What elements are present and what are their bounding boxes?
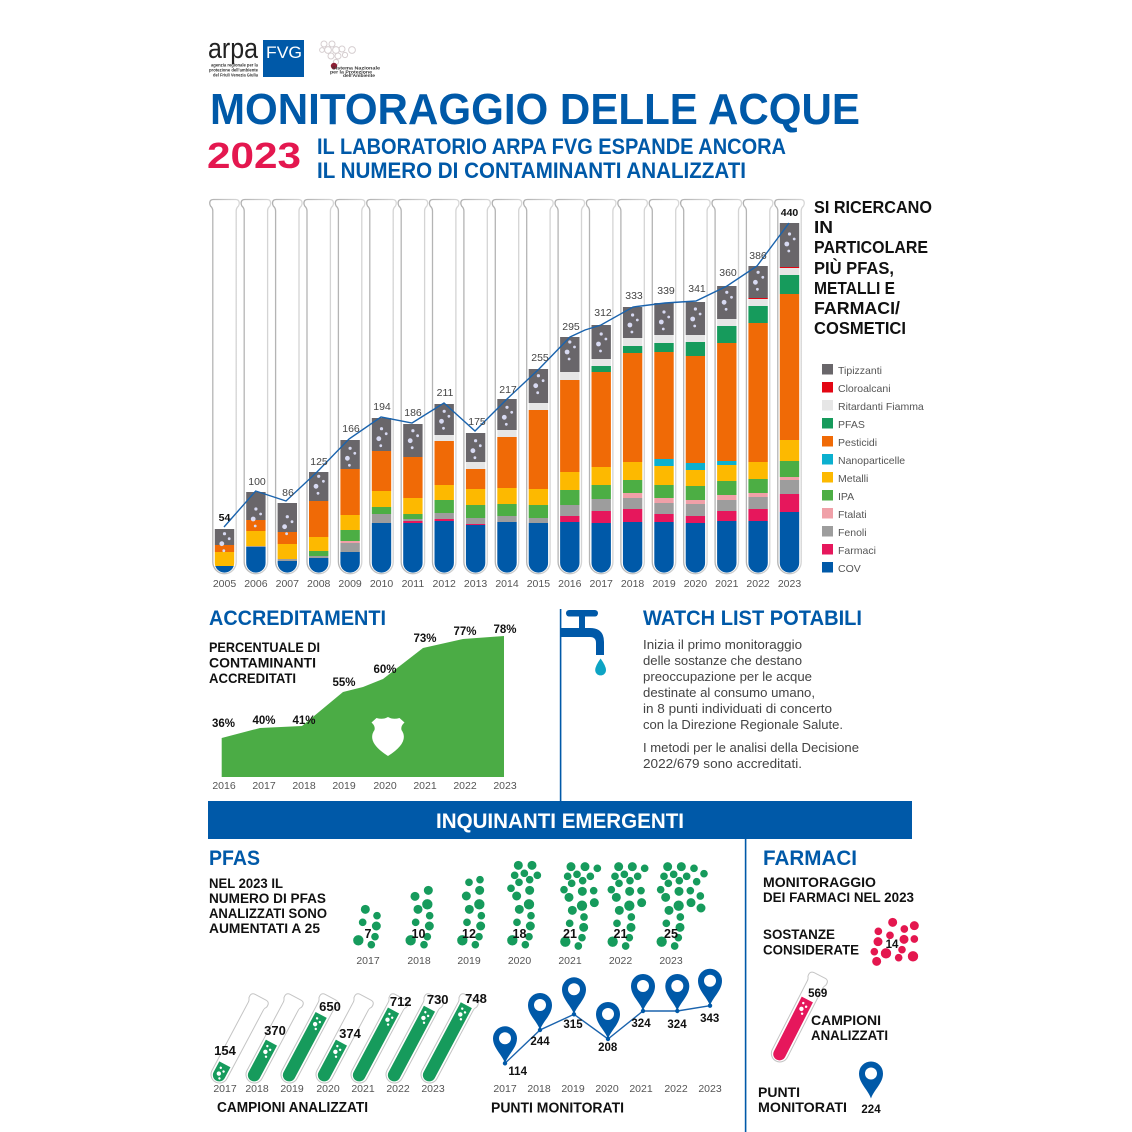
tube 374 [312,992,375,1087]
tube 2023 [775,200,804,575]
year axis: 2006 [244,578,268,590]
percentages: 77% [453,626,477,638]
sample values: 370 [264,1023,286,1038]
subtitle: IL NUMERO DI CONTAMINANTI ANALIZZATI [317,158,746,183]
total values: 211 [437,387,454,399]
year axis: 2019 [652,578,676,590]
total values: 341 [688,283,706,295]
legend: Metalli [838,473,868,485]
text block: I metodi per le analisi della Decisione [643,740,859,755]
year axis: 2012 [433,578,456,590]
banner: inquinanti emergenti: INQUINANTI EMERGENTI [436,810,684,833]
cluster years: 2020 [508,955,531,967]
text: percentuale di contaminanti accreditati: CONTAMINANTI [209,654,316,670]
total values: 386 [749,250,767,262]
total values: 217 [499,384,517,396]
legend: IPA [838,491,854,503]
tube 2007 [273,200,302,575]
total values: 295 [562,321,580,333]
value 14: 14 [886,939,899,951]
year axis: 2021 [715,578,739,590]
chart: punti monitorati pins [491,969,722,1116]
heading: accreditamenti: ACCREDITAMENTI [209,607,386,630]
text: percentuale di contaminanti accreditati [209,639,320,686]
cluster counts: 12 [462,927,476,941]
percentages: 41% [292,715,316,727]
year axis: 2014 [495,578,519,590]
tube 2017 [586,200,616,575]
cluster counts: 21 [614,927,627,941]
caption: punti monitorati: PUNTI MONITORATI [491,1100,624,1116]
cluster counts: 25 [664,927,678,941]
cluster years: 2017 [356,955,380,967]
legend: COV [838,563,861,575]
panel: PFAS [209,847,707,967]
text: numero di PFAS: AUMENTATI A 25 [209,921,320,936]
years: 2016 [212,780,236,792]
cluster counts: 18 [513,927,526,941]
text: monitoraggio dei farmaci [763,875,914,905]
year axis: 2015 [527,578,550,590]
text: numero di PFAS: NUMERO DI PFAS [209,891,326,906]
text: campioni analizzati: ANALIZZATI [811,1027,888,1043]
chart: campioni analizzati tubes [207,991,487,1116]
point years: 2019 [561,1083,585,1095]
sample years: 2021 [351,1083,375,1095]
tube 2014 [492,200,522,575]
tube 2019 [649,200,679,575]
sample years: 2017 [213,1083,237,1095]
years: 2019 [332,780,356,792]
text: numero di PFAS [209,876,327,936]
point years: 2017 [493,1083,517,1095]
tube 2021 [712,200,742,575]
year axis: 2018 [621,578,644,590]
cluster years [356,955,683,967]
legend: Pesticidi [838,437,877,449]
logo: ARPA FVG: agenzia regionale per la [211,62,258,68]
map pins [493,969,722,1063]
sample years: 2022 [386,1083,410,1095]
sample values: 374 [339,1026,362,1041]
dot clusters [354,861,707,949]
percentages: 73% [413,633,437,645]
point values: 315 [563,1019,583,1031]
point years: 2020 [595,1083,619,1095]
point values: 324 [667,1019,687,1031]
tube 154 [207,992,270,1087]
trend line [224,223,789,527]
years: 2021 [413,780,437,792]
callout: si ricercano: PARTICOLARE [814,237,928,257]
logo: Sistema Nazionale per la Protezione dell'Ambiente: Sistema Nazionale [332,66,381,70]
years: 2022 [453,780,477,792]
year axis: 2005 [213,578,236,590]
text: campioni analizzati: CAMPIONI [811,1012,881,1028]
callout: si ricercano: IN [814,217,833,237]
callout: si ricercano: PIÙ PFAS, [814,257,894,278]
percentages: 40% [252,715,276,727]
year 2023: 2023 [207,135,301,176]
cluster counts: 21 [563,927,577,941]
tube 748 [417,992,480,1087]
text: sostanze considerate: SOSTANZE [763,926,835,942]
years [212,780,517,792]
value 224: 224 [861,1104,881,1116]
sample years [213,1083,445,1095]
sample values: 712 [390,994,412,1009]
tube 2006 [241,200,271,575]
cluster counts [365,927,678,941]
total values: 100 [248,476,266,488]
total values: 54 [219,512,230,524]
text block: 2022/679 sono accreditati. [643,756,802,771]
year axis: 2023 [778,578,801,590]
tube 2018 [618,200,647,575]
logo: ARPA FVG: FVG [266,43,302,62]
total values: 255 [531,352,549,364]
year axis: 2008 [307,578,331,590]
sample values [214,991,487,1058]
tube 2012 [429,200,459,575]
year axis [213,578,801,590]
sample values: 650 [319,999,341,1014]
point values: 114 [508,1066,528,1078]
cluster years: 2018 [407,955,431,967]
text block [643,637,859,771]
logo: Sistema Nazionale per la Protezione dell'Ambiente: dell'Ambiente [343,73,376,78]
percentages: 78% [493,624,517,636]
total values: 86 [282,487,294,499]
caption: campioni analizzati: CAMPIONI ANALIZZATI [217,1100,368,1116]
total values: 339 [657,285,675,297]
year axis: 2011 [402,578,424,590]
point years: 2022 [664,1083,688,1095]
tube 2022 [743,200,773,575]
text: monitoraggio dei farmaci: DEI FARMACI NEL 2023 [763,890,914,905]
logo: ARPA FVG: arpa [208,33,259,65]
year axis: 2016 [558,578,582,590]
banner: inquinanti emergenti [208,801,912,839]
years: 2018 [292,780,316,792]
chart: test tube stacked bars [210,200,804,590]
callout: si ricercano [814,197,932,338]
sample values: 748 [465,991,487,1006]
heading: PFAS: PFAS [209,847,260,870]
subtitle [317,134,786,183]
total values: 312 [594,307,612,319]
sample years: 2018 [245,1083,269,1095]
panel: watch list potabili [643,607,862,771]
point values: 244 [530,1036,550,1048]
text: punti monitorati: PUNTI [758,1084,800,1100]
tube 2013 [461,200,490,575]
year axis: 2007 [276,578,299,590]
legend: Cloroalcani [838,383,891,395]
cluster years: 2022 [609,955,632,967]
tube 712 [347,992,410,1087]
sample values: 154 [214,1043,237,1058]
heading: farmaci: FARMACI [763,847,857,870]
tube 2011 [398,200,428,575]
total values: 333 [625,290,643,302]
year axis: 2017 [590,578,613,590]
point years: 2021 [629,1083,653,1095]
year axis: 2010 [370,578,393,590]
text: monitoraggio dei farmaci: MONITORAGGIO [763,875,876,890]
text block: preoccupazione per le acque [643,669,812,684]
legend: Farmaci [838,545,876,557]
value 569: 569 [808,988,827,1000]
text: numero di PFAS: ANALIZZATI SONO [209,906,327,921]
callout: si ricercano: FARMACI/ [814,298,900,318]
percentages: 36% [212,718,235,730]
year axis: 2022 [746,578,770,590]
year axis: 2020 [684,578,707,590]
tube 650 [277,992,340,1087]
text: punti monitorati: MONITORATI [758,1099,847,1115]
text block: destinate al consumo umano, [643,685,815,700]
legend: Nanoparticelle [838,455,905,467]
text: punti monitorati [758,1084,847,1115]
year axis: 2013 [464,578,487,590]
tube 2008 [304,200,333,575]
text: percentuale di contaminanti accreditati: PERCENTUALE DI [209,639,320,655]
logo: ARPA FVG: del Friuli Venezia Giulia [213,72,258,78]
logo: Sistema Nazionale per la Protezione dell'Ambiente: per la Protezione [330,70,373,74]
connecting line [503,1004,712,1066]
legend: Ritardanti Fiamma [838,401,924,413]
tube 2015 [524,200,553,575]
cluster years: 2021 [558,955,582,967]
years: 2023 [493,780,517,792]
text: campioni analizzati [811,1012,888,1043]
total values: 175 [468,416,486,428]
title: MONITORAGGIO DELLE ACQUE [210,85,860,134]
point years: 2023 [698,1083,722,1095]
tube 2010 [367,200,396,575]
text: sostanze considerate: CONSIDERATE [763,942,859,958]
text block: in 8 punti individuati di concerto [643,701,832,716]
legend: Tipizzanti [838,365,882,377]
tube 2020 [681,200,710,575]
sample years: 2020 [316,1083,340,1095]
point values [508,1013,719,1078]
total values: 186 [404,407,422,419]
icon: shield [372,717,404,756]
point values: 324 [631,1018,651,1030]
icon: tap [560,610,606,675]
percentages [212,624,517,730]
legend [822,364,924,575]
years: 2017 [252,780,276,792]
cluster years: 2023 [659,955,683,967]
point years: 2018 [527,1083,551,1095]
tube 2005 [210,200,239,575]
cluster counts: 7 [365,927,372,941]
legend: Fenoli [838,527,867,539]
point years [493,1083,722,1095]
pin [859,1062,883,1098]
sample years: 2019 [280,1083,304,1095]
cluster years: 2019 [457,955,481,967]
sample values: 730 [427,992,449,1007]
total values: 440 [781,207,798,219]
total values: 194 [373,401,391,413]
tube 730 [382,992,445,1087]
years: 2020 [373,780,397,792]
total values: 360 [719,267,737,279]
area chart [222,636,504,777]
legend: Ftalati [838,509,867,521]
panel: farmaci [758,847,918,1116]
subtitle: IL LABORATORIO ARPA FVG ESPANDE ANCORA [317,134,786,159]
cluster counts: 10 [412,927,425,941]
percentages: 60% [373,664,397,676]
callout: si ricercano: COSMETICI [814,318,906,338]
logo: Sistema Nazionale per la Protezione dell'Ambiente [320,41,381,78]
panel: accreditamenti [209,607,517,792]
tube 370 [242,992,305,1087]
text block: delle sostanze che destano [643,653,802,668]
logo: ARPA FVG: protezione dell'ambiente [209,68,258,72]
callout: si ricercano: SI RICERCANO [814,197,932,217]
text block: Inizia il primo monitoraggio [643,637,802,652]
text: sostanze considerate [763,926,859,958]
text block: con la Direzione Regionale Salute. [643,717,843,732]
tube 2016 [555,200,585,575]
callout: si ricercano: METALLI E [814,278,895,298]
red dots [871,918,918,965]
total values [219,207,798,524]
point values: 343 [700,1013,719,1025]
tube 2009 [335,200,365,575]
pink tube [767,971,829,1066]
text: percentuale di contaminanti accreditati: ACCREDITATI [209,670,296,686]
total values: 166 [342,423,360,435]
total values: 125 [310,456,328,468]
year axis: 2009 [338,578,362,590]
heading: watch list: WATCH LIST POTABILI [643,607,862,630]
legend: PFAS [838,419,865,431]
text: numero di PFAS: NEL 2023 IL [209,876,283,891]
logo: ARPA FVG [208,33,304,78]
sample years: 2023 [421,1083,445,1095]
percentages: 55% [332,677,356,689]
point values: 208 [598,1042,618,1054]
